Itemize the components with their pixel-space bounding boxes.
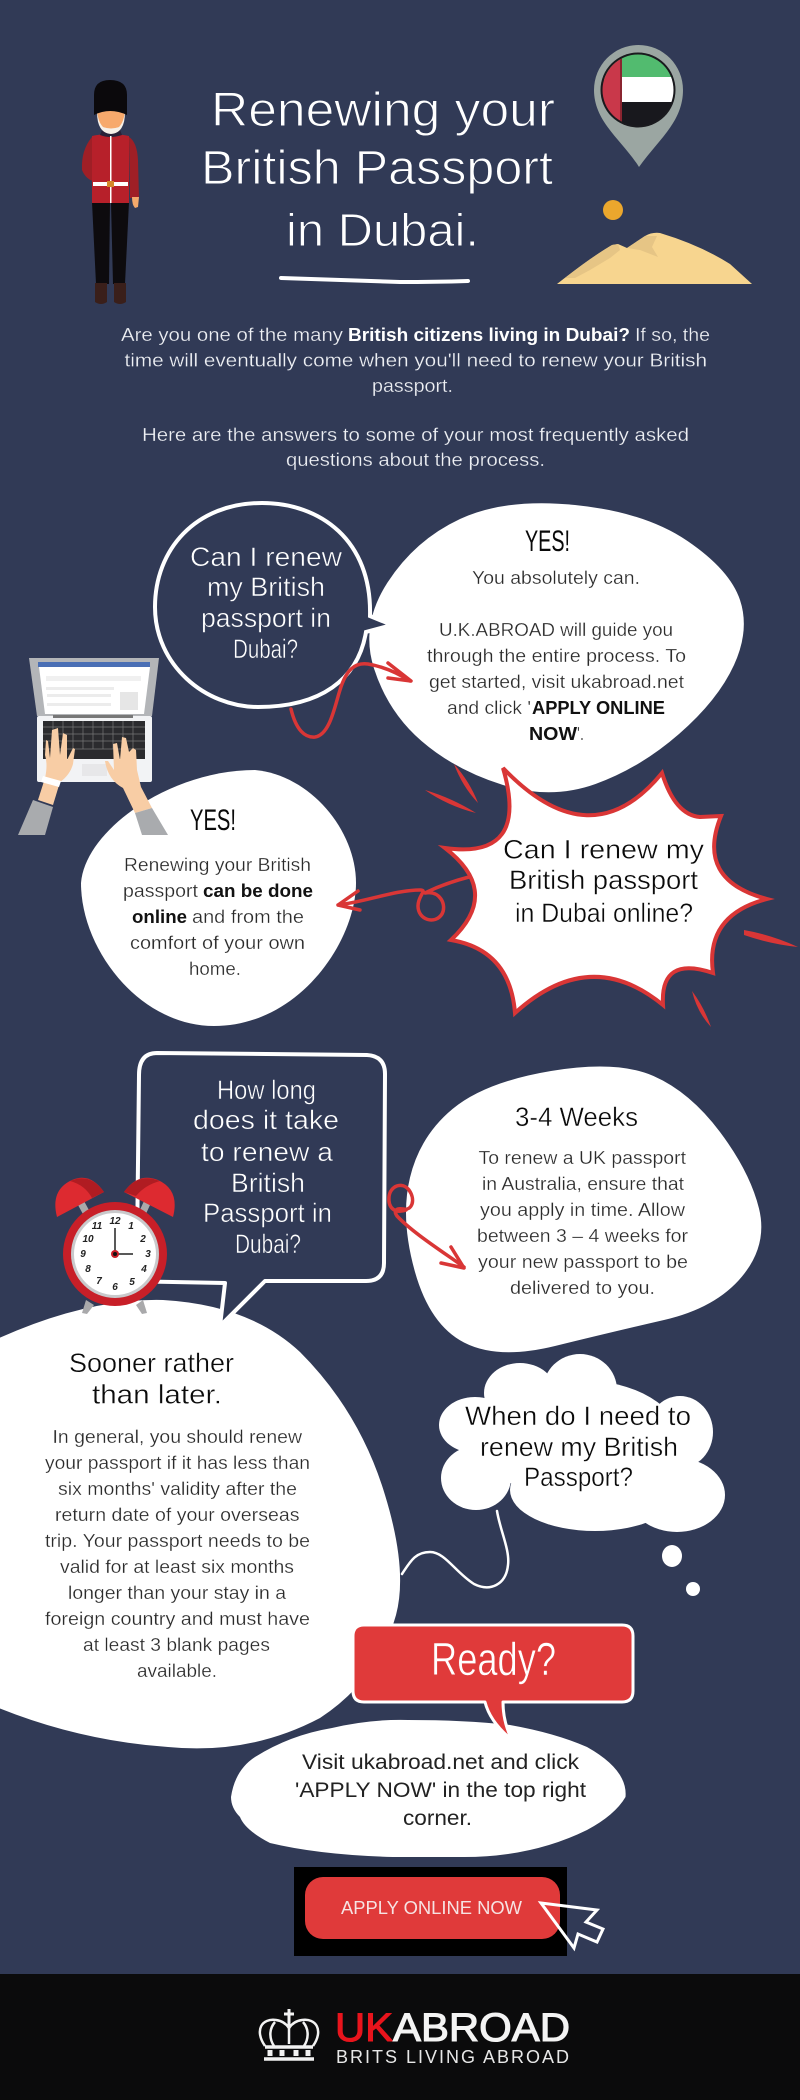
panel: answer 3-4 weeks: you apply in time. Allow (480, 1199, 686, 1220)
panel: answer sooner rather than later: longer than your stay in a (68, 1582, 287, 1603)
panel: answer yes, you can: U.K.ABROAD will guide you (439, 619, 673, 640)
panel: question renew online starburst: British passport (509, 865, 699, 895)
panel: answer 3-4 weeks: delivered to you. (510, 1277, 655, 1298)
panel: answer sooner rather than later: foreign country and must have (45, 1608, 310, 1629)
panel: question how long: to renew a (201, 1137, 334, 1167)
icon: red burst marks (425, 764, 798, 1027)
panel: answer sooner rather than later: trip. Your passport needs to be (45, 1530, 310, 1551)
intro paragraph: Here are the answers to some of your most frequently asked (142, 424, 689, 445)
icon: alarm clock: 12 (109, 1216, 121, 1227)
panel: question can I renew (155, 503, 392, 707)
icon: alarm clock: 5 (129, 1277, 135, 1288)
title (201, 84, 555, 282)
panel: answer yes online: can be done (203, 880, 313, 901)
icon: alarm clock: 10 (82, 1234, 94, 1245)
panel: answer 3-4 weeks: To renew a UK passport (478, 1147, 686, 1168)
icon: alarm clock: 8 (85, 1264, 91, 1275)
panel: question how long: British (231, 1168, 305, 1198)
icon: alarm clock: 3 (145, 1249, 151, 1260)
panel: answer yes online: and from the (192, 906, 304, 927)
panel: answer sooner rather than later: available. (137, 1660, 217, 1681)
intro paragraph (121, 324, 710, 470)
intro paragraph: Are you one of the many (121, 324, 344, 345)
panel: question when do I need cloud: Passport? (524, 1462, 633, 1492)
arrow: white squiggle (402, 1511, 508, 1587)
icon: UAE flag map pin (594, 45, 683, 167)
icon: laptop with hands (18, 658, 168, 835)
intro paragraph: time will eventually come when you'll need to renew your British (124, 350, 707, 370)
panel: visit ukabroad oval (231, 1720, 626, 1857)
panel: question can I renew: passport in (201, 603, 331, 633)
panel: ready callout (353, 1625, 633, 1740)
panel: visit ukabroad oval: Visit ukabroad.net and click (302, 1750, 579, 1774)
panel: question how long (120, 1053, 385, 1326)
panel: visit ukabroad oval: corner. (403, 1806, 472, 1830)
intro paragraph: passport. (372, 375, 453, 396)
panel: answer sooner rather than later: valid for at least six months (60, 1556, 294, 1577)
icon: alarm clock: 2 (139, 1234, 146, 1245)
panel: answer yes online: passport (123, 880, 198, 901)
footer: ABROAD (393, 2006, 570, 2050)
icon: alarm clock: 1 (128, 1221, 134, 1232)
panel: answer sooner rather than later: than later. (92, 1380, 222, 1410)
panel: question when do I need cloud: renew my British (480, 1432, 678, 1462)
panel: question renew online starburst (445, 768, 767, 1013)
panel: answer yes, you can: through the entire process. To (427, 645, 686, 666)
panel: answer yes, you can: YES! (525, 525, 570, 558)
icon: cursor (541, 1903, 603, 1948)
panel: answer yes, you can: and click ' (447, 697, 531, 718)
arrow: question to yes (291, 663, 411, 737)
icon: alarm clock: 11 (92, 1221, 103, 1232)
panel: answer sooner rather than later: In general, you should renew (52, 1426, 303, 1447)
button: apply online now: APPLY ONLINE NOW (341, 1898, 522, 1918)
panel: answer sooner rather than later: your passport if it has less than (45, 1452, 310, 1473)
title: Renewing your (211, 84, 555, 137)
panel: answer yes online: YES! (190, 804, 236, 837)
panel: answer 3-4 weeks (406, 1067, 761, 1352)
panel: answer yes online: online (132, 906, 187, 927)
title: British Passport (201, 142, 553, 195)
panel: answer sooner rather than later (0, 1300, 400, 1748)
panel: answer yes online: Renewing your British (124, 854, 311, 875)
panel: answer 3-4 weeks: between 3 – 4 weeks for (477, 1225, 688, 1246)
panel: question can I renew: Can I renew (190, 542, 343, 572)
panel: ready callout: Ready? (431, 1633, 556, 1685)
panel: answer yes, you can: '. (577, 723, 584, 744)
panel: visit ukabroad oval: 'APPLY NOW' in the top right (295, 1778, 586, 1802)
intro paragraph: British citizens living in Dubai? (348, 324, 630, 345)
arrow: how long to 3-4 weeks (389, 1185, 464, 1268)
panel: answer yes, you can: NOW (529, 723, 578, 744)
panel: answer sooner rather than later: at least 3 blank pages (83, 1634, 270, 1655)
panel: answer 3-4 weeks: 3-4 Weeks (515, 1102, 638, 1132)
panel: answer yes, you can: APPLY ONLINE (532, 697, 665, 718)
panel: answer yes online: home. (189, 958, 241, 979)
icon: alarm clock: 9 (80, 1249, 86, 1260)
panel: answer yes, you can (369, 503, 744, 792)
panel: answer sooner rather than later: Sooner rather (69, 1348, 234, 1378)
icon: cloud thought dots (662, 1545, 700, 1596)
button: apply online now (294, 1867, 567, 1956)
panel: question how long: How long (217, 1075, 316, 1105)
icon: alarm clock: 4 (140, 1264, 147, 1275)
footer: UK (335, 2006, 393, 2050)
panel: answer yes online: comfort of your own (130, 932, 305, 953)
panel: answer 3-4 weeks: your new passport to be (478, 1251, 688, 1272)
panel: answer sooner rather than later: six months' validity after the (58, 1478, 297, 1499)
panel: question how long: Passport in (203, 1198, 332, 1228)
icon: crown logo (260, 2009, 318, 2059)
panel: question how long: Dubai? (235, 1229, 301, 1259)
icon: alarm clock (55, 1178, 175, 1314)
arrow: starburst to yes (338, 877, 469, 920)
panel: question renew online starburst: in Dubai online? (515, 898, 693, 928)
intro paragraph: questions about the process. (286, 449, 545, 470)
icon: alarm clock: 7 (96, 1276, 102, 1287)
panel: question how long: does it take (193, 1105, 339, 1135)
icon: sun (603, 200, 623, 220)
panel: answer 3-4 weeks: in Australia, ensure that (482, 1173, 684, 1194)
panel: answer yes online (81, 770, 356, 1026)
icon: sand dunes (557, 233, 752, 284)
icon: royal guard (82, 80, 139, 304)
panel: answer yes, you can: You absolutely can. (472, 567, 640, 588)
icon: alarm clock: 6 (112, 1282, 118, 1293)
title: in Dubai. (286, 204, 479, 256)
panel: question can I renew: Dubai? (233, 634, 298, 664)
panel: question when do I need cloud (439, 1354, 725, 1532)
intro paragraph: If so, the (635, 324, 710, 345)
panel: question can I renew: my British (207, 572, 325, 602)
footer (0, 1974, 800, 2100)
footer: BRITS LIVING ABROAD (336, 2047, 569, 2067)
panel: answer yes, you can: get started, visit ukabroad.net (429, 671, 684, 692)
panel: answer sooner rather than later: return date of your overseas (55, 1504, 300, 1525)
panel: question renew online starburst: Can I renew my (503, 834, 705, 864)
panel: question when do I need cloud: When do I need to (465, 1401, 691, 1431)
